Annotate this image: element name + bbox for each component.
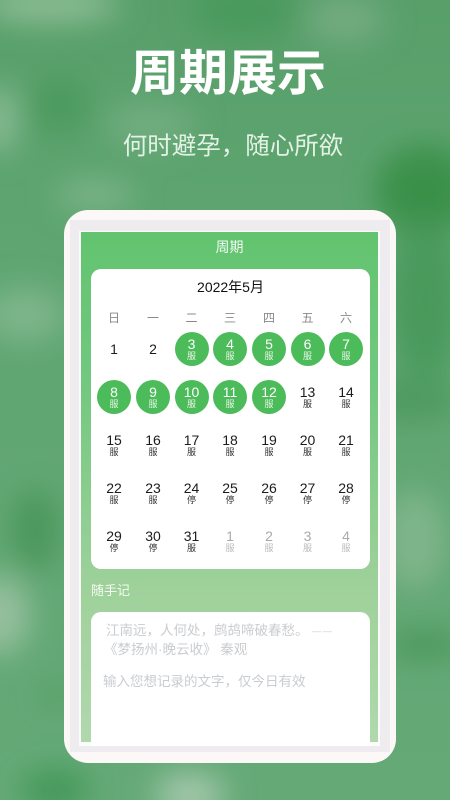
calendar week 1: 7 — [342, 336, 350, 352]
screen header: 周期 — [216, 239, 244, 255]
calendar week 2: 8 — [110, 384, 118, 400]
calendar week 2: 13 — [300, 384, 315, 400]
calendar week 2: 服 — [264, 399, 274, 409]
notes card — [91, 612, 370, 746]
calendar week 2: 服 — [225, 399, 234, 409]
calendar week 4: 停 — [264, 495, 274, 505]
calendar week 5: 29 — [106, 528, 122, 544]
calendar week 3: 服 — [341, 447, 350, 457]
calendar week 2 — [97, 380, 354, 414]
title: 周期展示 — [130, 47, 326, 101]
calendar week 3: 17 — [184, 432, 199, 448]
weekday header: 日 — [108, 311, 120, 325]
calendar week 4: 服 — [109, 495, 118, 505]
calendar week 5: 服 — [187, 543, 196, 553]
calendar week 4: 停 — [187, 495, 196, 505]
calendar week 3: 服 — [148, 447, 158, 457]
calendar week 4: 27 — [300, 480, 315, 496]
calendar week 5: 服 — [341, 543, 350, 553]
weekday header: 六 — [340, 311, 352, 325]
calendar week 1: 4 — [226, 336, 234, 352]
notes label: 随手记 — [91, 583, 130, 598]
calendar week 2: 11 — [223, 384, 237, 400]
calendar week 3: 18 — [222, 432, 238, 448]
calendar week 2: 服 — [148, 399, 158, 409]
calendar week 5: 30 — [145, 528, 161, 544]
calendar week 3: 16 — [145, 432, 161, 448]
calendar week 4: 24 — [184, 480, 199, 496]
calendar week 1: 2 — [149, 341, 157, 357]
calendar week 1: 3 — [188, 336, 195, 352]
calendar week 1: 服 — [225, 351, 234, 361]
calendar week 1: 服 — [303, 351, 312, 361]
calendar week 5: 31 — [184, 528, 199, 544]
calendar week 4: 服 — [148, 495, 158, 505]
calendar week 2: 服 — [341, 399, 350, 409]
calendar week 2: 服 — [187, 399, 196, 409]
calendar week 3: 20 — [300, 432, 315, 448]
calendar week 1: 服 — [187, 351, 196, 361]
weekday header: 三 — [224, 311, 236, 325]
calendar week 5 — [106, 528, 350, 553]
calendar week 4: 停 — [341, 495, 350, 505]
calendar week 4: 26 — [261, 480, 277, 496]
subtitle: 何时避孕，随心所欲 — [123, 133, 343, 160]
calendar week 1 — [110, 332, 363, 366]
calendar week 3: 19 — [261, 432, 277, 448]
calendar week 5: 4 — [342, 528, 350, 544]
calendar week 4: 23 — [145, 480, 161, 496]
calendar week 3: 15 — [106, 432, 122, 448]
calendar week 2: 服 — [303, 399, 312, 409]
calendar card — [91, 269, 370, 569]
calendar week 2: 9 — [149, 384, 157, 400]
notes quote — [104, 623, 333, 657]
calendar week 5: 停 — [109, 543, 118, 553]
calendar week 1: 服 — [341, 351, 350, 361]
calendar week 4: 停 — [225, 495, 234, 505]
weekday header: 五 — [301, 311, 314, 325]
calendar week 3: 服 — [187, 447, 196, 457]
calendar week 2: 10 — [184, 384, 199, 400]
calendar week 2: 14 — [338, 384, 354, 400]
calendar week 5: 服 — [225, 543, 234, 553]
calendar week 5: 1 — [226, 528, 234, 544]
weekday header: 一 — [147, 311, 159, 325]
weekday header: 四 — [263, 311, 275, 325]
calendar week 4: 22 — [106, 480, 122, 496]
calendar week 2: 服 — [109, 399, 118, 409]
calendar week 5: 停 — [148, 543, 158, 553]
calendar week 3: 服 — [264, 447, 274, 457]
calendar month heading: 2022年5月 — [197, 279, 264, 295]
notes placeholder: 输入您想记录的文字，仅今日有效 — [103, 674, 306, 689]
calendar week 4: 25 — [222, 480, 238, 496]
calendar week 1: 服 — [264, 351, 274, 361]
calendar week 4: 停 — [303, 495, 312, 505]
calendar week 5: 2 — [265, 528, 273, 544]
calendar week 4: 28 — [338, 480, 354, 496]
notes quote: 江南远，人何处，鹧鸪啼破春愁。 —— — [106, 623, 333, 638]
calendar week 3: 服 — [303, 447, 312, 457]
calendar week 5: 3 — [304, 528, 311, 544]
calendar week 5: 服 — [303, 543, 312, 553]
calendar week 1: 5 — [265, 336, 273, 352]
calendar week 4 — [106, 480, 354, 505]
calendar week 3: 服 — [109, 447, 118, 457]
calendar week 3 — [106, 432, 354, 457]
calendar week 5: 服 — [264, 543, 274, 553]
calendar week 2: 12 — [261, 384, 277, 400]
calendar week 1: 1 — [110, 341, 118, 357]
notes quote: 《梦扬州·晚云收》 秦观 — [104, 642, 247, 657]
weekday header — [108, 311, 352, 325]
phone frame — [64, 210, 396, 763]
weekday header: 二 — [185, 311, 198, 325]
calendar week 1: 6 — [304, 336, 311, 352]
app screen — [81, 232, 378, 742]
calendar week 3: 服 — [225, 447, 234, 457]
calendar week 3: 21 — [338, 432, 354, 448]
